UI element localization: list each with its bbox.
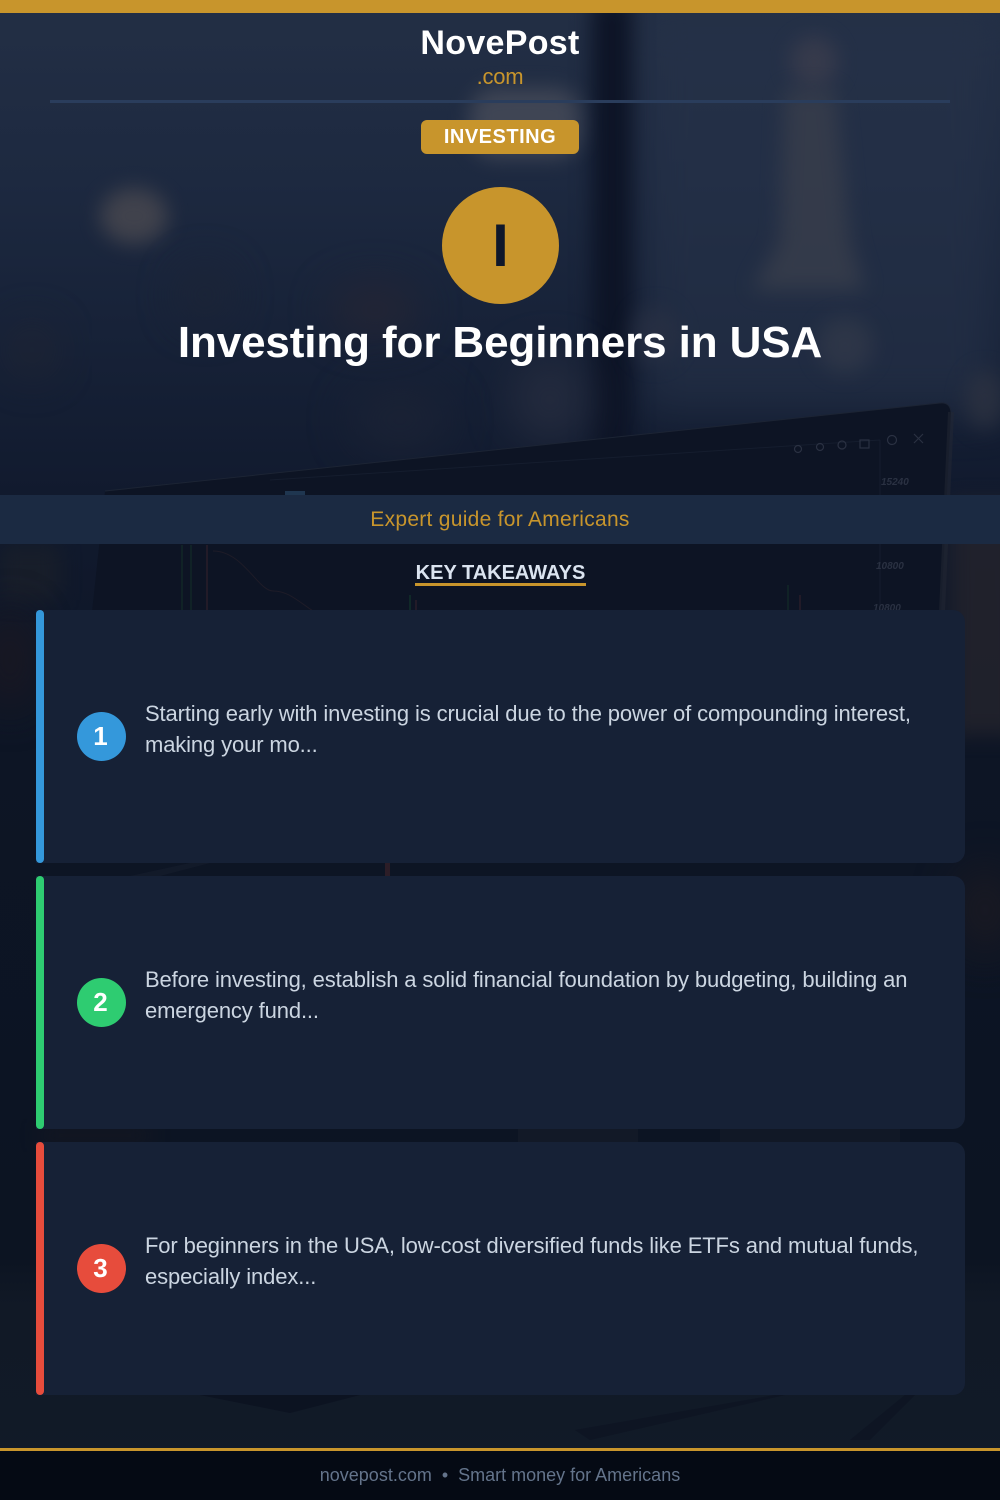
brand name: NovePost	[420, 24, 580, 62]
top accent bar	[0, 0, 1000, 13]
background: blurred photo of trading desk: 10800	[876, 561, 904, 572]
background: blurred photo of trading desk: 10800	[873, 603, 901, 614]
category badge: INVESTING	[444, 126, 556, 148]
category badge	[421, 120, 579, 154]
panel: takeaway 2	[36, 876, 965, 1129]
number badge 1	[77, 712, 126, 761]
section heading: key takeaways: KEY TAKEAWAYS	[416, 562, 585, 584]
panel: takeaway 1	[36, 610, 965, 863]
number badge 3: 3	[93, 1253, 108, 1283]
icon: letter circle	[442, 187, 559, 304]
icon: letter circle: I	[492, 212, 509, 279]
subtitle band	[0, 495, 1000, 544]
footer: novepost.com • Smart money for Americans	[320, 1465, 680, 1485]
brand suffix: .com	[477, 64, 523, 89]
number badge 3	[77, 1244, 126, 1293]
title: Investing for Beginners in USA	[178, 318, 822, 367]
footer	[0, 1448, 1000, 1500]
subtitle band: Expert guide for Americans	[370, 508, 630, 531]
takeaway 1 text: Starting early with investing is crucial due to the power of compounding interest, making your mo...	[145, 701, 911, 757]
takeaway 3 text: For beginners in the USA, low-cost diversified funds like ETFs and mutual funds, especially index...	[145, 1233, 918, 1289]
background: blurred photo of trading desk: 15240	[881, 477, 909, 488]
panel: takeaway 3	[36, 1142, 965, 1395]
number badge 2: 2	[93, 987, 108, 1017]
number badge 2	[77, 978, 126, 1027]
takeaway 2 text: Before investing, establish a solid financial foundation by budgeting, building an emergency fund...	[145, 967, 907, 1023]
number badge 1: 1	[93, 721, 108, 751]
